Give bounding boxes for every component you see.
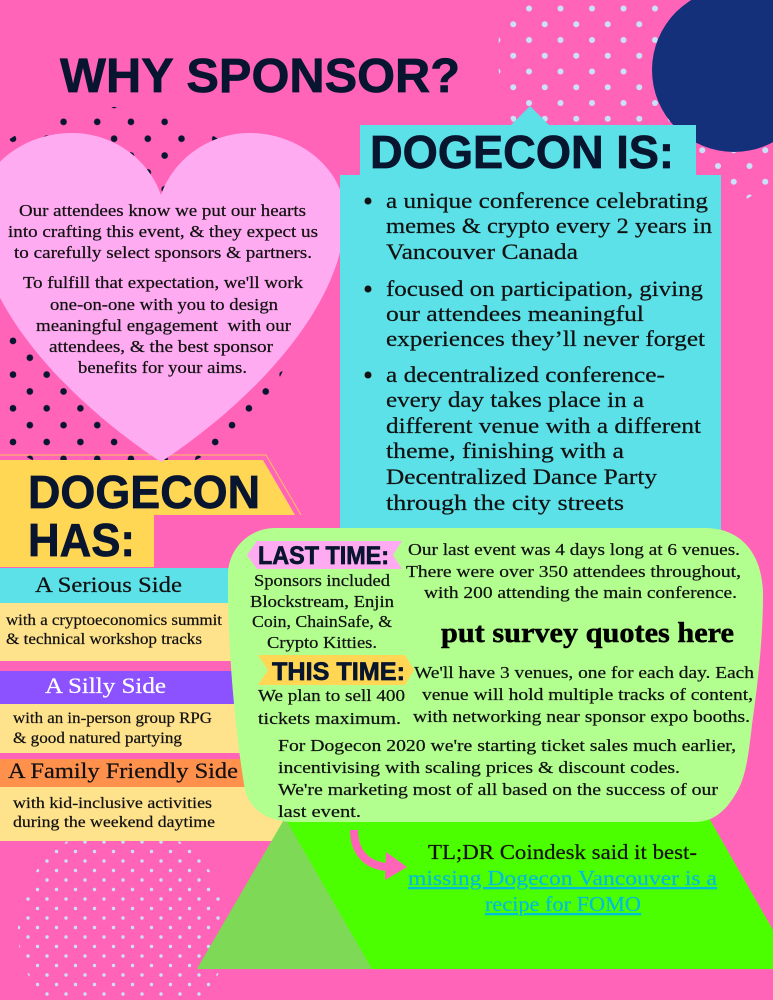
- tag: this time: THIS TIME:: [272, 658, 405, 686]
- panel: dogecon has banner: [0, 455, 301, 567]
- text block: venues: with networking near sponsor expo booths.: [413, 707, 750, 726]
- arrow: pink curved: [354, 830, 407, 880]
- text block: last event facts: [406, 540, 741, 602]
- text block: ticket sales and marketing: [278, 736, 736, 821]
- bullet list: dogecon is: different venue with a different: [386, 413, 701, 438]
- bullet list: dogecon is: focused on participation, giving: [386, 276, 703, 301]
- tag: last time: LAST TIME:: [258, 542, 389, 570]
- panel: last and this time bubble: [228, 528, 763, 822]
- text block: heart copy: attendees, & the best sponsor: [49, 337, 274, 356]
- heading: survey quotes: put survey quotes here: [441, 617, 734, 649]
- bullet list: dogecon is: a decentralized conference-: [386, 362, 665, 387]
- panel: a serious side: with a cryptoeconomics summit: [6, 612, 223, 629]
- panel: a family friendly side: [0, 758, 285, 841]
- text block: ticket sales and marketing: For Dogecon 2020 we're starting ticket sales much earlier,: [278, 736, 736, 755]
- panel: a family friendly side: A Family Friendly Side: [8, 758, 238, 783]
- bullet list: dogecon is: [364, 188, 712, 515]
- text block: tl;dr: recipe for FOMO: [485, 892, 641, 916]
- text block: last time sponsors: Blockstream, Enjin: [250, 592, 394, 611]
- text block: last time sponsors: Sponsors included: [254, 571, 391, 590]
- text block: ticket sales and marketing: incentivising with scaling prices & discount codes.: [278, 758, 680, 777]
- text block: last time sponsors: Coin, ChainSafe, &: [252, 612, 392, 631]
- text block: tl;dr: missing Dogecon Vancouver is a: [408, 866, 718, 890]
- dotted circle: top right: [498, 0, 773, 221]
- text block: ticket plan: We plan to sell 400: [258, 686, 405, 705]
- text block: heart copy: into crafting this event, & they expect us: [8, 222, 318, 241]
- bullet list: dogecon is: every day takes place in a: [386, 387, 644, 412]
- panel: heart: [0, 133, 345, 462]
- triangle: olive: [197, 818, 372, 969]
- text block: tl;dr: TL;DR Coindesk said it best-: [428, 840, 697, 864]
- panel: a silly side: & good natured partying: [13, 730, 182, 747]
- bullet list: dogecon is: our attendees meaningful: [386, 301, 644, 326]
- heading: dogecon has: [28, 466, 260, 566]
- heading: dogecon has: HAS:: [28, 514, 135, 566]
- dotted circle: bottom left: [18, 825, 228, 1000]
- text block: heart copy: meaningful engagement with our: [36, 316, 292, 335]
- heading: dogecon is: DOGECON IS:: [370, 126, 674, 178]
- text block: heart copy: to carefully select sponsors & partners.: [14, 243, 312, 262]
- text block: last time sponsors: Crypto Kitties.: [267, 633, 377, 652]
- panel: a serious side: & technical workshop tracks: [6, 631, 202, 648]
- bullet list: dogecon is: Decentralized Dance Party: [386, 464, 657, 489]
- bullet list: dogecon is: memes & crypto every 2 years in: [386, 213, 712, 238]
- text block: last time sponsors: [250, 571, 394, 652]
- text block: ticket plan: tickets maximum.: [258, 709, 401, 728]
- panel: a silly side: with an in-person group RPG: [13, 710, 212, 727]
- text block: heart copy: one-on-one with you to design: [50, 295, 278, 314]
- panel: a silly side: [0, 671, 245, 753]
- dotted circle: behind heart: [0, 107, 300, 479]
- heading: dogecon has: DOGECON: [28, 466, 260, 518]
- bullet list: dogecon is: theme, finishing with a: [386, 438, 624, 463]
- panel: tl;dr green: [197, 818, 773, 969]
- panel: dogecon is: [340, 106, 721, 530]
- text block: ticket sales and marketing: We're marketing most of all based on the success of our: [278, 780, 719, 799]
- bullet list: dogecon is: a unique conference celebrating: [386, 188, 708, 213]
- title: WHY SPONSOR?: [60, 50, 460, 103]
- panel: a silly side: A Silly Side: [45, 673, 166, 698]
- text block: venues: We'll have 3 venues, one for each day. Each: [414, 663, 755, 682]
- text block: last event facts: There were over 350 attendees throughout,: [406, 562, 741, 581]
- text block: tl;dr: [408, 840, 718, 916]
- panel: a serious side: A Serious Side: [35, 572, 182, 597]
- panel: a family friendly side: during the weekend daytime: [13, 814, 215, 831]
- navy circle: [652, 0, 773, 152]
- text block: venues: venue will hold multiple tracks of content,: [422, 685, 753, 704]
- text block: venues: [413, 663, 755, 726]
- text block: ticket plan: [258, 686, 405, 728]
- panel: a family friendly side: with kid-inclusive activities: [13, 795, 212, 812]
- panel: a serious side: [0, 568, 245, 661]
- text block: heart copy: To fulfill that expectation, we'll work: [23, 273, 304, 292]
- text block: last event facts: with 200 attending the main conference.: [424, 583, 737, 602]
- text block: last event facts: Our last event was 4 days long at 6 venues.: [408, 540, 740, 559]
- text block: heart copy: Our attendees know we put our hearts: [19, 201, 306, 220]
- bullet list: dogecon is: experiences they’ll never forget: [386, 326, 705, 351]
- text block: heart copy: benefits for your aims.: [78, 358, 247, 377]
- text block: ticket sales and marketing: last event.: [278, 802, 361, 821]
- bullet list: dogecon is: Vancouver Canada: [386, 239, 578, 264]
- text block: heart copy: [8, 201, 318, 377]
- bullet list: dogecon is: through the city streets: [386, 490, 624, 515]
